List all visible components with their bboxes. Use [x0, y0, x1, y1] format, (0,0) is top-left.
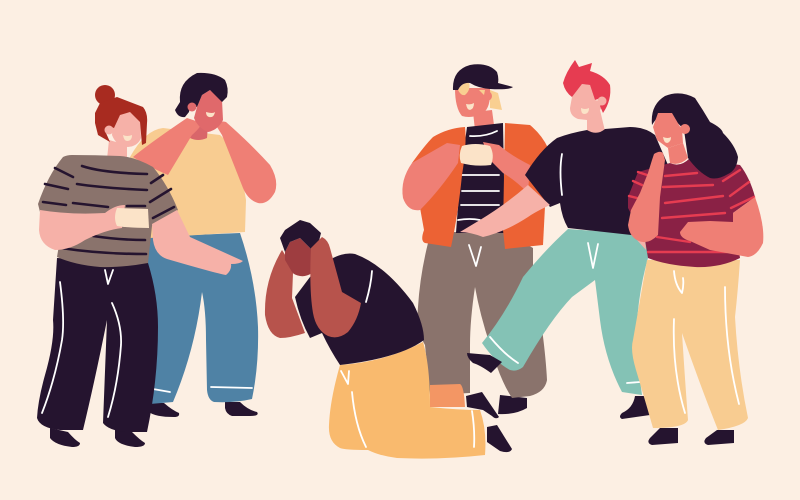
figure: man in yellow shirt and blue trousers	[130, 73, 276, 417]
figure: woman with red bun, striped shirt and black trousers	[37, 85, 243, 447]
figure: kneeling boy with hands on head	[265, 220, 512, 459]
figure: man in black tee and teal trousers kicking	[460, 60, 668, 419]
figure: woman with long black hair, red striped shirt and yellow trousers	[628, 93, 763, 445]
figure: teen in cap, orange jacket and taupe trousers	[402, 64, 548, 414]
